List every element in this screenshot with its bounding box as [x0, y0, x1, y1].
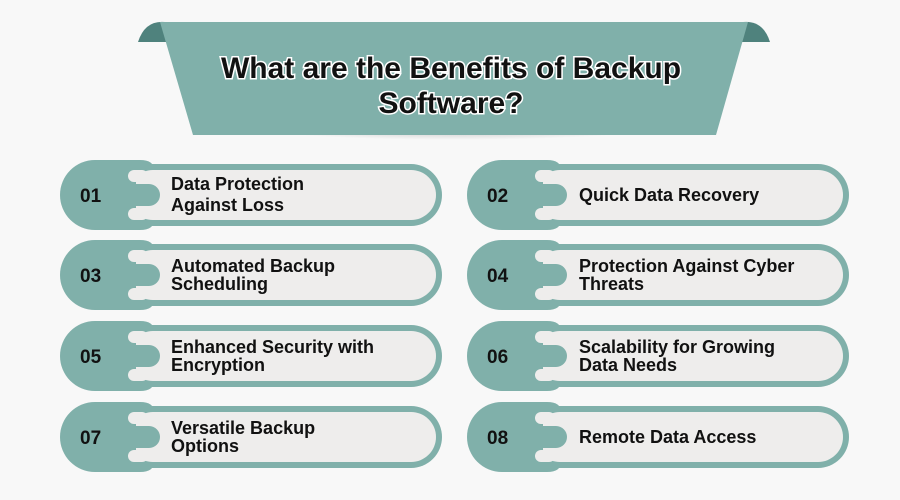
- card 06: [467, 321, 849, 391]
- card 05: Enhanced Security with: [171, 337, 374, 357]
- card 02: 02: [487, 186, 508, 207]
- card 07: Options: [171, 436, 239, 456]
- card 05: Encryption: [171, 355, 265, 375]
- card 01: 01: [80, 186, 102, 207]
- card 01: Against Loss: [171, 195, 284, 215]
- card 06: Scalability for Growing: [579, 337, 775, 357]
- card 06: Data Needs: [579, 355, 677, 375]
- title banner: [138, 22, 770, 158]
- card 04: Protection Against Cyber: [579, 256, 794, 276]
- title banner: Software?: [378, 87, 524, 120]
- card 08: [467, 402, 849, 472]
- card 07: Versatile Backup: [171, 418, 315, 438]
- card 05: 05: [80, 347, 102, 368]
- card 03: Automated Backup: [171, 256, 335, 276]
- card 08: 08: [487, 428, 508, 449]
- card 02: Quick Data Recovery: [579, 185, 759, 205]
- card 04: [467, 240, 849, 310]
- card 03: 03: [80, 266, 101, 287]
- card 04: 04: [487, 266, 509, 287]
- card 01: Data Protection: [171, 174, 304, 194]
- card 02: [467, 160, 849, 230]
- card 05: [60, 321, 442, 391]
- card 04: Threats: [579, 274, 644, 294]
- card 01: [60, 160, 442, 230]
- title: What are the Benefits of Backup: [221, 52, 681, 85]
- card 08: Remote Data Access: [579, 427, 756, 447]
- card 07: 07: [80, 428, 101, 449]
- card 03: Scheduling: [171, 274, 268, 294]
- card 07: [60, 402, 442, 472]
- card 06: 06: [487, 347, 508, 368]
- card 03: [60, 240, 442, 310]
